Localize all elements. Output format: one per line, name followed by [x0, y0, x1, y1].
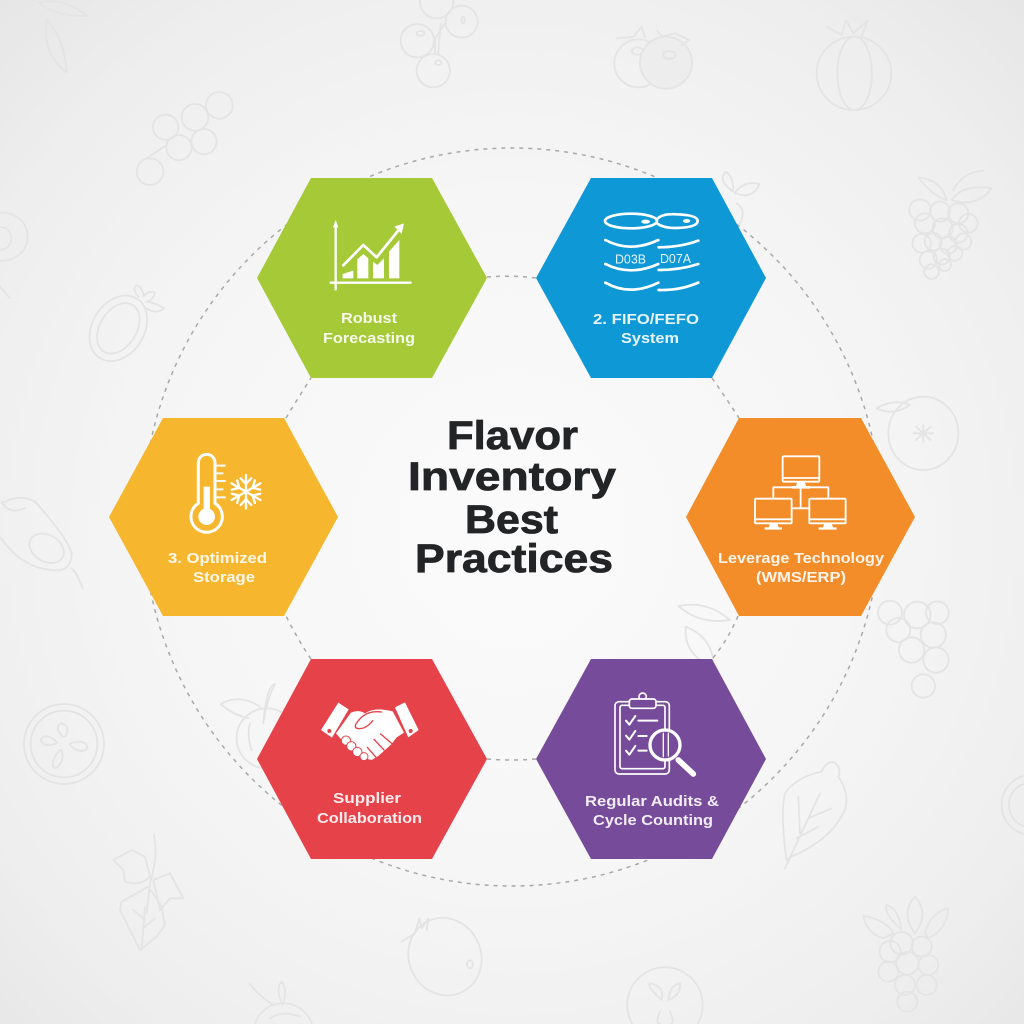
label [317, 791, 422, 827]
label: Robust [341, 311, 397, 327]
hexagon: orange [686, 418, 915, 616]
hexagon: blue [536, 178, 766, 378]
panel: Optimized Storage [109, 418, 338, 616]
hexagon: purple [536, 659, 766, 859]
label: Storage [193, 570, 255, 586]
bg icon: round fruit [78, 285, 164, 372]
label: Cycle Counting [593, 813, 713, 829]
bg icon: leaves bottom left [113, 835, 183, 950]
bg icon: cherries top [401, 0, 478, 87]
bg icon: tomato [396, 906, 494, 1007]
panel: Regular Audits [536, 659, 766, 859]
bg icon: avocado half left edge [0, 213, 28, 298]
bg icon: big leaf [783, 762, 847, 868]
icon: stacked barrels: D07A [660, 251, 691, 266]
hexagon: green [257, 178, 487, 378]
label: (WMS/ERP) [756, 570, 846, 586]
icon: clipboard and magnifier [615, 693, 693, 774]
title: Inventory [408, 455, 617, 499]
label [718, 551, 884, 586]
label [323, 311, 415, 347]
bg icon: citrus slice left [24, 704, 104, 784]
icon: handshake [321, 702, 419, 761]
bg icon: pomegranate [817, 20, 891, 110]
hexagon: red [257, 659, 487, 859]
title: Practices [415, 537, 613, 581]
label [593, 312, 699, 347]
panel: Supplier Collaboration [257, 659, 487, 859]
title: Flavor [447, 414, 578, 458]
panel: FIFO/FEFO System [536, 178, 766, 378]
label: System [621, 331, 679, 347]
bg icon: leaves top left [38, 1, 87, 73]
icon: stacked barrels [605, 214, 698, 290]
bg icon: fruit bottom [250, 982, 313, 1024]
bg icon: citrus slice right edge [1002, 775, 1024, 835]
panel: Robust Forecasting [257, 178, 487, 378]
label: Leverage Technology [718, 551, 884, 567]
label: 2. FIFO/FEFO [593, 312, 699, 328]
label: 3. Optimized [168, 551, 267, 567]
bg icon: apple behind red hexagon [221, 684, 297, 768]
title [408, 414, 617, 581]
bg icon: berry cluster [137, 92, 233, 185]
title: Best [465, 498, 558, 542]
inner dashed connectors [286, 276, 739, 760]
icon: networked computers [755, 456, 846, 530]
bg icon: orange fruit right [877, 397, 958, 470]
label: Forecasting [323, 331, 415, 347]
bg icon: grapes top right [909, 171, 992, 279]
label: Regular Audits & [585, 794, 720, 810]
bg icon: citrus slice bottom [627, 967, 703, 1024]
label: Collaboration [317, 811, 422, 827]
bg icon: leaf behind blue hexagon [723, 172, 759, 223]
bg icon: avocado [0, 498, 83, 588]
bg icon: grapes bottom right [863, 897, 948, 1012]
hexagon: yellow [109, 418, 338, 616]
bg icon: blueberries [614, 27, 692, 89]
label: Supplier [333, 791, 401, 807]
panel: Leverage Technology [686, 418, 915, 616]
dashed ring [143, 148, 881, 886]
label [585, 794, 720, 829]
bg icon: leaves near orange hexagon [678, 605, 730, 660]
label [168, 551, 267, 586]
icon: thermometer and snowflake [191, 454, 263, 532]
icon: growth chart [331, 220, 411, 289]
icon: stacked barrels: D03B [615, 252, 646, 267]
bg icon: grapes right [878, 601, 949, 698]
